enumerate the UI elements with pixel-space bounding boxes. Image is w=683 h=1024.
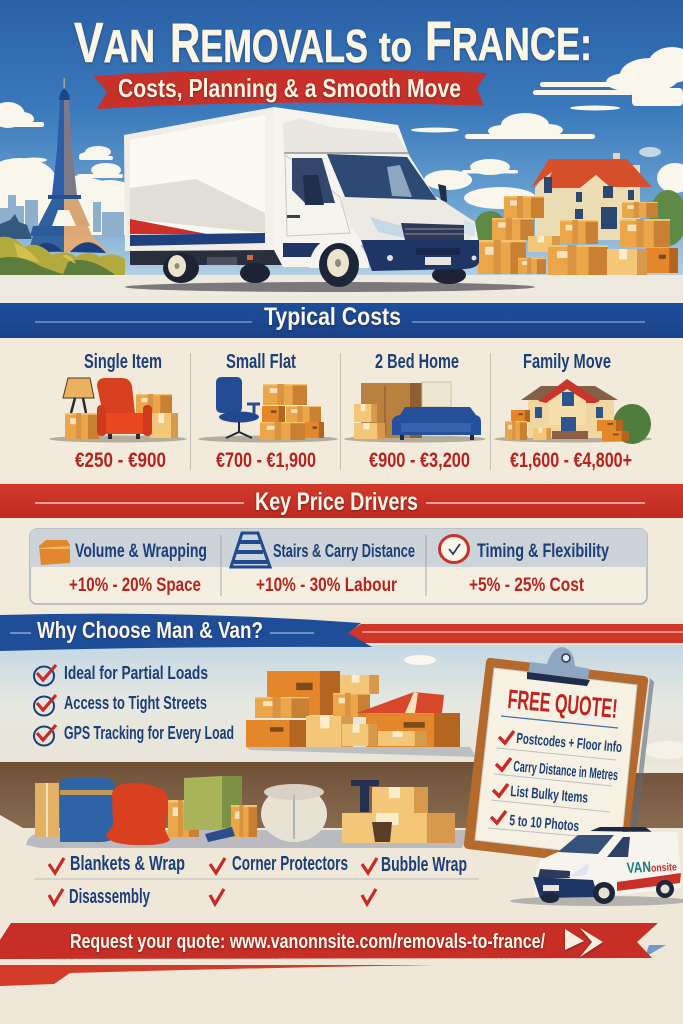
title: to: [379, 23, 412, 70]
driver: stairs and carry distance: +10% - 30% Labour: [256, 575, 397, 596]
icon: arrow: [565, 928, 603, 957]
driver: timing and flexibility: Timing & Flexibility: [477, 541, 609, 562]
checklist: included services: Disassembly: [69, 886, 151, 908]
driver: stairs and carry distance: Stairs & Carry Distance: [273, 541, 415, 561]
callout: free quote clipboard: 5 to 10 Photos: [509, 812, 580, 835]
prices: €700 - €1,900: [216, 449, 316, 472]
title: REMOVALS: [170, 11, 368, 74]
driver: timing and flexibility: [440, 536, 609, 596]
title: [74, 9, 592, 75]
callout: free quote clipboard: List Bulky Items: [510, 783, 589, 807]
checklist: included services: [34, 853, 479, 908]
driver: volume and wrapping: [39, 540, 207, 596]
panel: why choose background: [0, 645, 683, 928]
call to action ribbon: [0, 923, 666, 959]
column: 2 bed home: [344, 351, 486, 442]
prices: €250 - €900: [75, 449, 166, 472]
column: family move: [494, 351, 652, 444]
icon: stacked boxes: [246, 671, 476, 757]
subtitle ribbon: [94, 69, 487, 109]
title: VAN: [74, 11, 155, 75]
column: small flat: Small Flat: [226, 351, 296, 373]
callout: free quote clipboard: [464, 647, 654, 870]
column: single item: Single Item: [84, 351, 162, 373]
title: FRANCE:: [425, 9, 592, 72]
checklist: benefits: Access to Tight Streets: [64, 693, 207, 713]
driver: volume and wrapping: +10% - 20% Space: [69, 575, 201, 596]
call to action ribbon: Request your quote: www.vanonnsite.com/removals-to-france/: [70, 931, 545, 953]
icon: VANonsite branded van: [510, 827, 683, 906]
column: 2 bed home: 2 Bed Home: [375, 351, 459, 373]
callout: free quote clipboard: Postcodes + Floor Info: [516, 730, 623, 756]
checklist: benefits: [34, 663, 234, 746]
checklist: benefits: GPS Tracking for Every Load: [64, 723, 234, 743]
checklist: included services: Corner Protectors: [232, 853, 348, 875]
heading: typical costs band: [0, 303, 683, 338]
column: family move: Family Move: [523, 351, 611, 373]
checklist: included services: Bubble Wrap: [381, 854, 467, 876]
heading: typical costs band: Typical Costs: [264, 303, 401, 331]
icon: packing materials row: [26, 776, 470, 848]
checklist: benefits: Ideal for Partial Loads: [64, 663, 208, 683]
icon: large white removals truck: [124, 107, 535, 292]
driver: stairs and carry distance: [231, 533, 415, 596]
icon: Eiffel tower: [28, 78, 108, 253]
panel: typical costs: [0, 338, 683, 483]
prices: €900 - €3,200: [369, 449, 470, 472]
driver: timing and flexibility: +5% - 25% Cost: [469, 575, 585, 596]
prices: €1,600 - €4,800+: [510, 449, 632, 472]
column: single item: [49, 351, 187, 442]
icon: house with boxes: [474, 153, 683, 275]
clouds: [0, 47, 683, 235]
bushes: [0, 237, 125, 278]
panel: road: [0, 275, 683, 303]
heading: key price drivers band: Key Price Drivers: [255, 488, 418, 516]
city skyline: [0, 195, 124, 238]
heading: why choose man and van band: Why Choose Man & Van?: [37, 617, 263, 643]
decorative lower red strip: [0, 965, 435, 986]
prices: [75, 449, 632, 472]
driver: volume and wrapping: Volume & Wrapping: [75, 541, 207, 562]
panel: hero sky scene: [0, 0, 683, 280]
icon: VANonsite branded van: VANonsite: [626, 857, 677, 877]
checklist: included services: Blankets & Wrap: [70, 853, 185, 875]
subtitle ribbon: Costs, Planning & a Smooth Move: [118, 73, 461, 103]
heading: key price drivers band: [0, 484, 683, 518]
heading: why choose man and van band: [0, 614, 683, 651]
column: small flat: [198, 351, 338, 442]
panel: key price drivers: [0, 518, 683, 618]
